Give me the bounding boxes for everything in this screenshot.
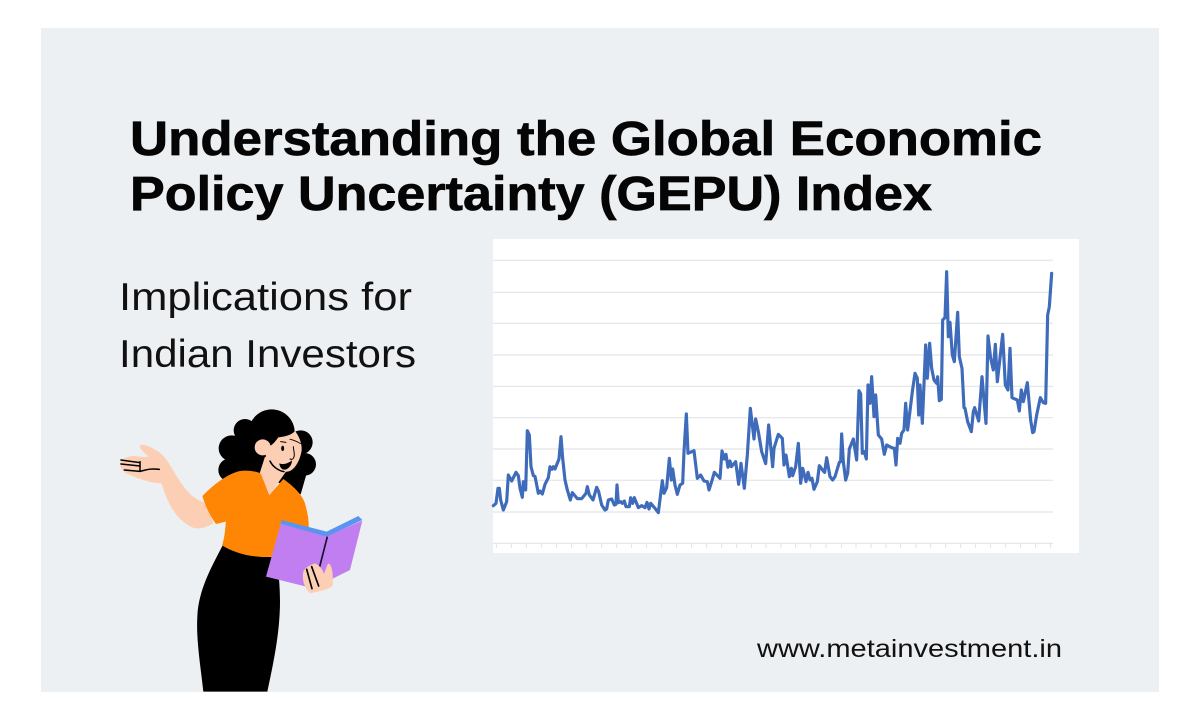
subtitle <box>119 276 416 376</box>
skirt <box>197 545 280 692</box>
line chart: GEPU index <box>493 239 1079 553</box>
title: Policy Uncertainty (GEPU) Index <box>130 168 932 221</box>
title <box>130 113 1042 221</box>
shirt <box>202 471 309 557</box>
book <box>266 516 362 593</box>
hair <box>218 409 316 494</box>
book hand <box>303 563 333 593</box>
arm and hand <box>120 445 213 528</box>
subtitle: Implications for <box>119 276 412 319</box>
subtitle: Indian Investors <box>119 333 416 376</box>
illustration: woman with book <box>120 409 362 692</box>
title: Understanding the Global Economic <box>130 113 1042 166</box>
head and face <box>255 431 302 494</box>
website url: www.metainvestment.in <box>756 635 1062 663</box>
data line <box>493 272 1052 513</box>
